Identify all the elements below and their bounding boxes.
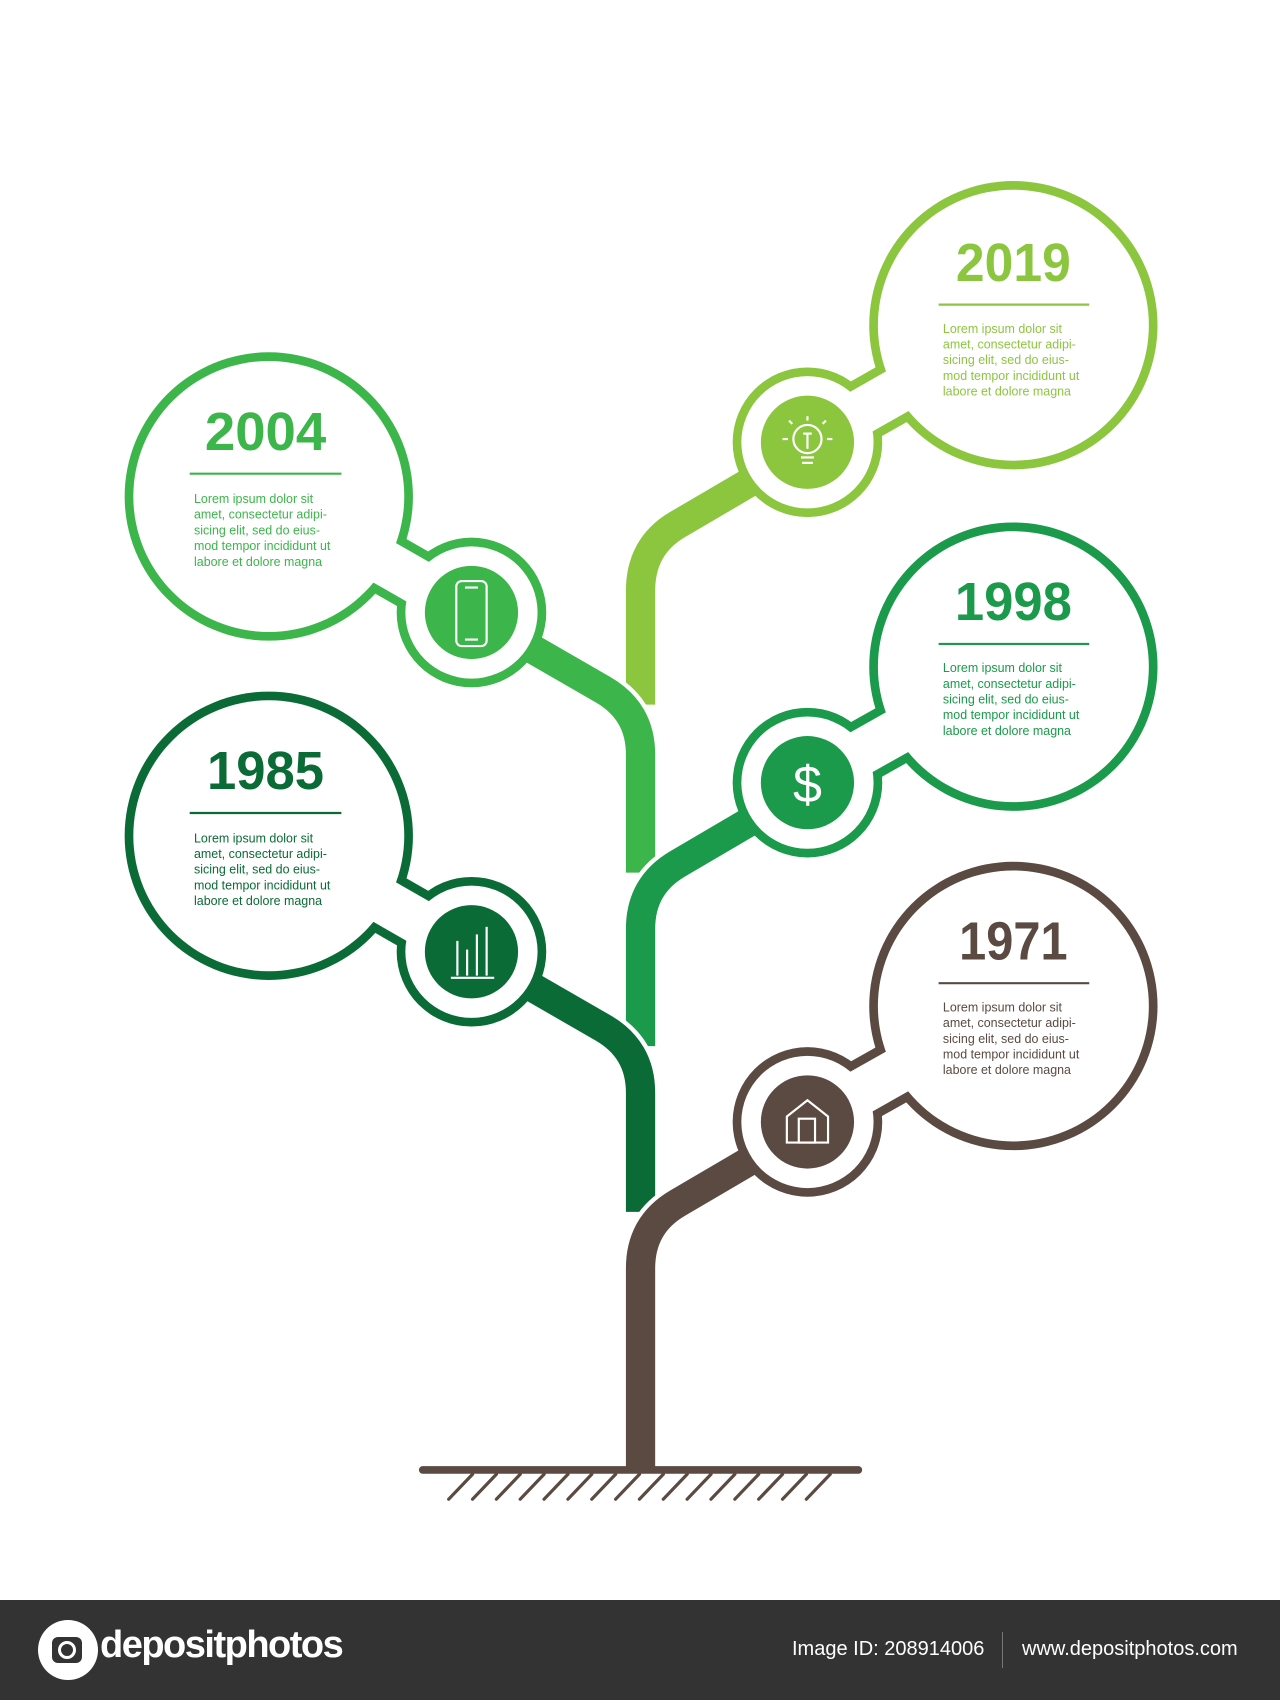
icon: house bbox=[787, 1100, 828, 1143]
node 1998: mod tempor incididunt ut bbox=[943, 708, 1080, 722]
node 1971: labore et dolore magna bbox=[943, 1063, 1071, 1077]
node 2019: labore et dolore magna bbox=[943, 385, 1071, 399]
footer bar bbox=[0, 1600, 1280, 1700]
node 1998: labore et dolore magna bbox=[943, 724, 1071, 738]
node 1985: labore et dolore magna bbox=[194, 894, 322, 908]
node 1998 bbox=[733, 522, 1158, 857]
year 2019: 2019 bbox=[956, 233, 1071, 293]
node 2004: sicing elit, sed do eius- bbox=[194, 523, 320, 537]
icon: light bulb bbox=[783, 416, 832, 463]
year 1971: 1971 bbox=[959, 911, 1068, 971]
node 2004: labore et dolore magna bbox=[194, 555, 322, 569]
node 1985: Lorem ipsum dolor sit bbox=[194, 831, 314, 845]
node 1985 bbox=[125, 692, 546, 1027]
node 2004: Lorem ipsum dolor sit bbox=[194, 492, 314, 506]
node 2019: amet, consectetur adipi- bbox=[943, 338, 1076, 352]
node 2019: sicing elit, sed do eius- bbox=[943, 353, 1069, 367]
node 1985: amet, consectetur adipi- bbox=[194, 847, 327, 861]
node 2004: mod tempor incididunt ut bbox=[194, 539, 331, 553]
icon: bar chart bbox=[451, 927, 494, 978]
year 1985: 1985 bbox=[207, 741, 324, 801]
node 1985: mod tempor incididunt ut bbox=[194, 878, 331, 892]
node 2004 bbox=[125, 352, 546, 687]
node 1998: sicing elit, sed do eius- bbox=[943, 693, 1069, 707]
node 1998: amet, consectetur adipi- bbox=[943, 677, 1076, 691]
ground bbox=[423, 1470, 858, 1499]
footer brand text: depositphotos bbox=[100, 1624, 342, 1666]
year 2004: 2004 bbox=[205, 402, 326, 462]
year 1998: 1998 bbox=[955, 572, 1072, 632]
node 1971: mod tempor incididunt ut bbox=[943, 1048, 1080, 1062]
node 1971: amet, consectetur adipi- bbox=[943, 1016, 1076, 1030]
icon: phone bbox=[456, 581, 487, 646]
node 2019 bbox=[733, 181, 1158, 517]
node 1998: Lorem ipsum dolor sit bbox=[943, 661, 1063, 675]
node 2019: mod tempor incididunt ut bbox=[943, 369, 1080, 383]
icon: dollar: $ bbox=[793, 756, 822, 814]
footer image id: Image ID: 208914006 bbox=[792, 1638, 984, 1660]
footer logo bbox=[38, 1620, 98, 1680]
node 1971 bbox=[733, 862, 1158, 1197]
tree trunk and branches bbox=[531, 477, 759, 1472]
node 2004: amet, consectetur adipi- bbox=[194, 508, 327, 522]
node 1971: Lorem ipsum dolor sit bbox=[943, 1000, 1063, 1014]
node 1971: sicing elit, sed do eius- bbox=[943, 1032, 1069, 1046]
node 1985: sicing elit, sed do eius- bbox=[194, 863, 320, 877]
footer url: www.depositphotos.com bbox=[1022, 1638, 1238, 1660]
node 2019: Lorem ipsum dolor sit bbox=[943, 322, 1063, 336]
